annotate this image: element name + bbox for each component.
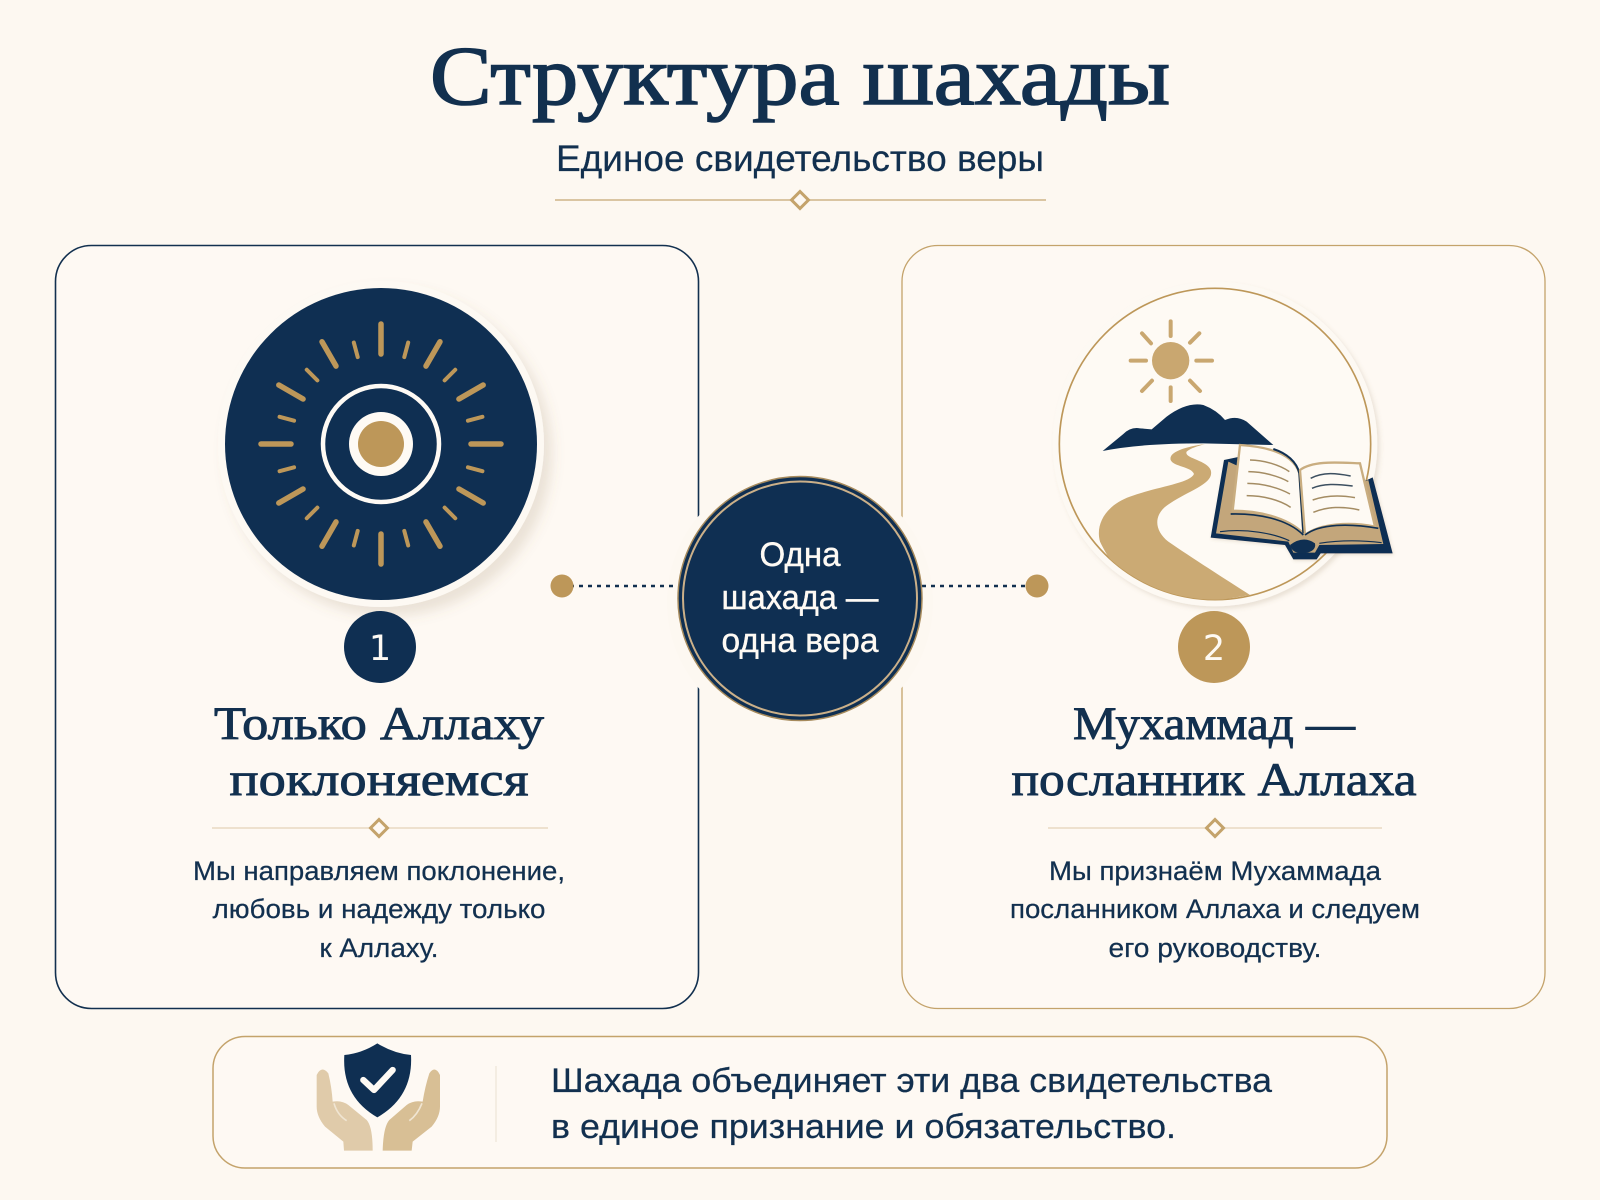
body text: Мы признаём Мухаммада: [1049, 856, 1382, 886]
sun: [1131, 321, 1212, 401]
heading: поклоняемся: [230, 754, 528, 806]
number badge 2: [1178, 611, 1250, 683]
body text: [193, 856, 565, 963]
heading: Только Аллаху: [214, 698, 545, 750]
central badge: one shahada, one faith: [678, 476, 922, 720]
open book: [1211, 445, 1393, 559]
summary text: [551, 1062, 1272, 1146]
summary text: в единое признание и обязательство.: [551, 1108, 1176, 1146]
panel: Muhammad messenger: [902, 246, 1545, 1008]
panel: only Allah: [56, 246, 698, 1008]
connector: dotted link to central circle: [550, 469, 1048, 735]
panel frame: [902, 246, 1545, 1008]
mountains: [1103, 404, 1273, 451]
number badge 1: [344, 611, 416, 683]
body text: к Аллаху.: [320, 933, 438, 963]
icon: path, sun, mountain and book: [1053, 282, 1393, 606]
body text: его руководству.: [1108, 933, 1322, 963]
panel frame: [213, 1036, 1387, 1168]
body text: любовь и надежду только: [212, 894, 546, 924]
body text: Мы направляем поклонение,: [193, 856, 565, 886]
panel: summary: [213, 1036, 1387, 1168]
panel frame: [56, 246, 698, 1008]
central badge: one shahada, one faith: одна вера: [722, 622, 879, 660]
heading: посланник Аллаха: [1012, 754, 1417, 806]
number badge 1: 1: [369, 629, 391, 669]
icon: hands holding shield: [317, 1043, 440, 1151]
heading: [214, 698, 545, 806]
central badge: one shahada, one faith: Одна: [760, 536, 841, 574]
road: [1099, 444, 1250, 603]
heading divider: [212, 820, 548, 836]
number badge 2: 2: [1203, 629, 1225, 669]
title: Структура шахады: [430, 30, 1170, 123]
summary text: Шахада объединяет эти два свидетельства: [551, 1062, 1272, 1100]
body text: посланником Аллаха и следуем: [1010, 894, 1420, 924]
heading: Мухаммад —: [1073, 698, 1356, 750]
subtitle: Единое свидетельство веры: [556, 138, 1044, 179]
vertical divider: [495, 1066, 497, 1142]
title divider: [555, 192, 1046, 208]
heading divider: [1048, 820, 1382, 836]
central badge: one shahada, one faith: шахада —: [722, 579, 878, 617]
body text: [1010, 856, 1420, 963]
heading: [1012, 698, 1417, 806]
icon: radiant circle: [218, 281, 544, 607]
